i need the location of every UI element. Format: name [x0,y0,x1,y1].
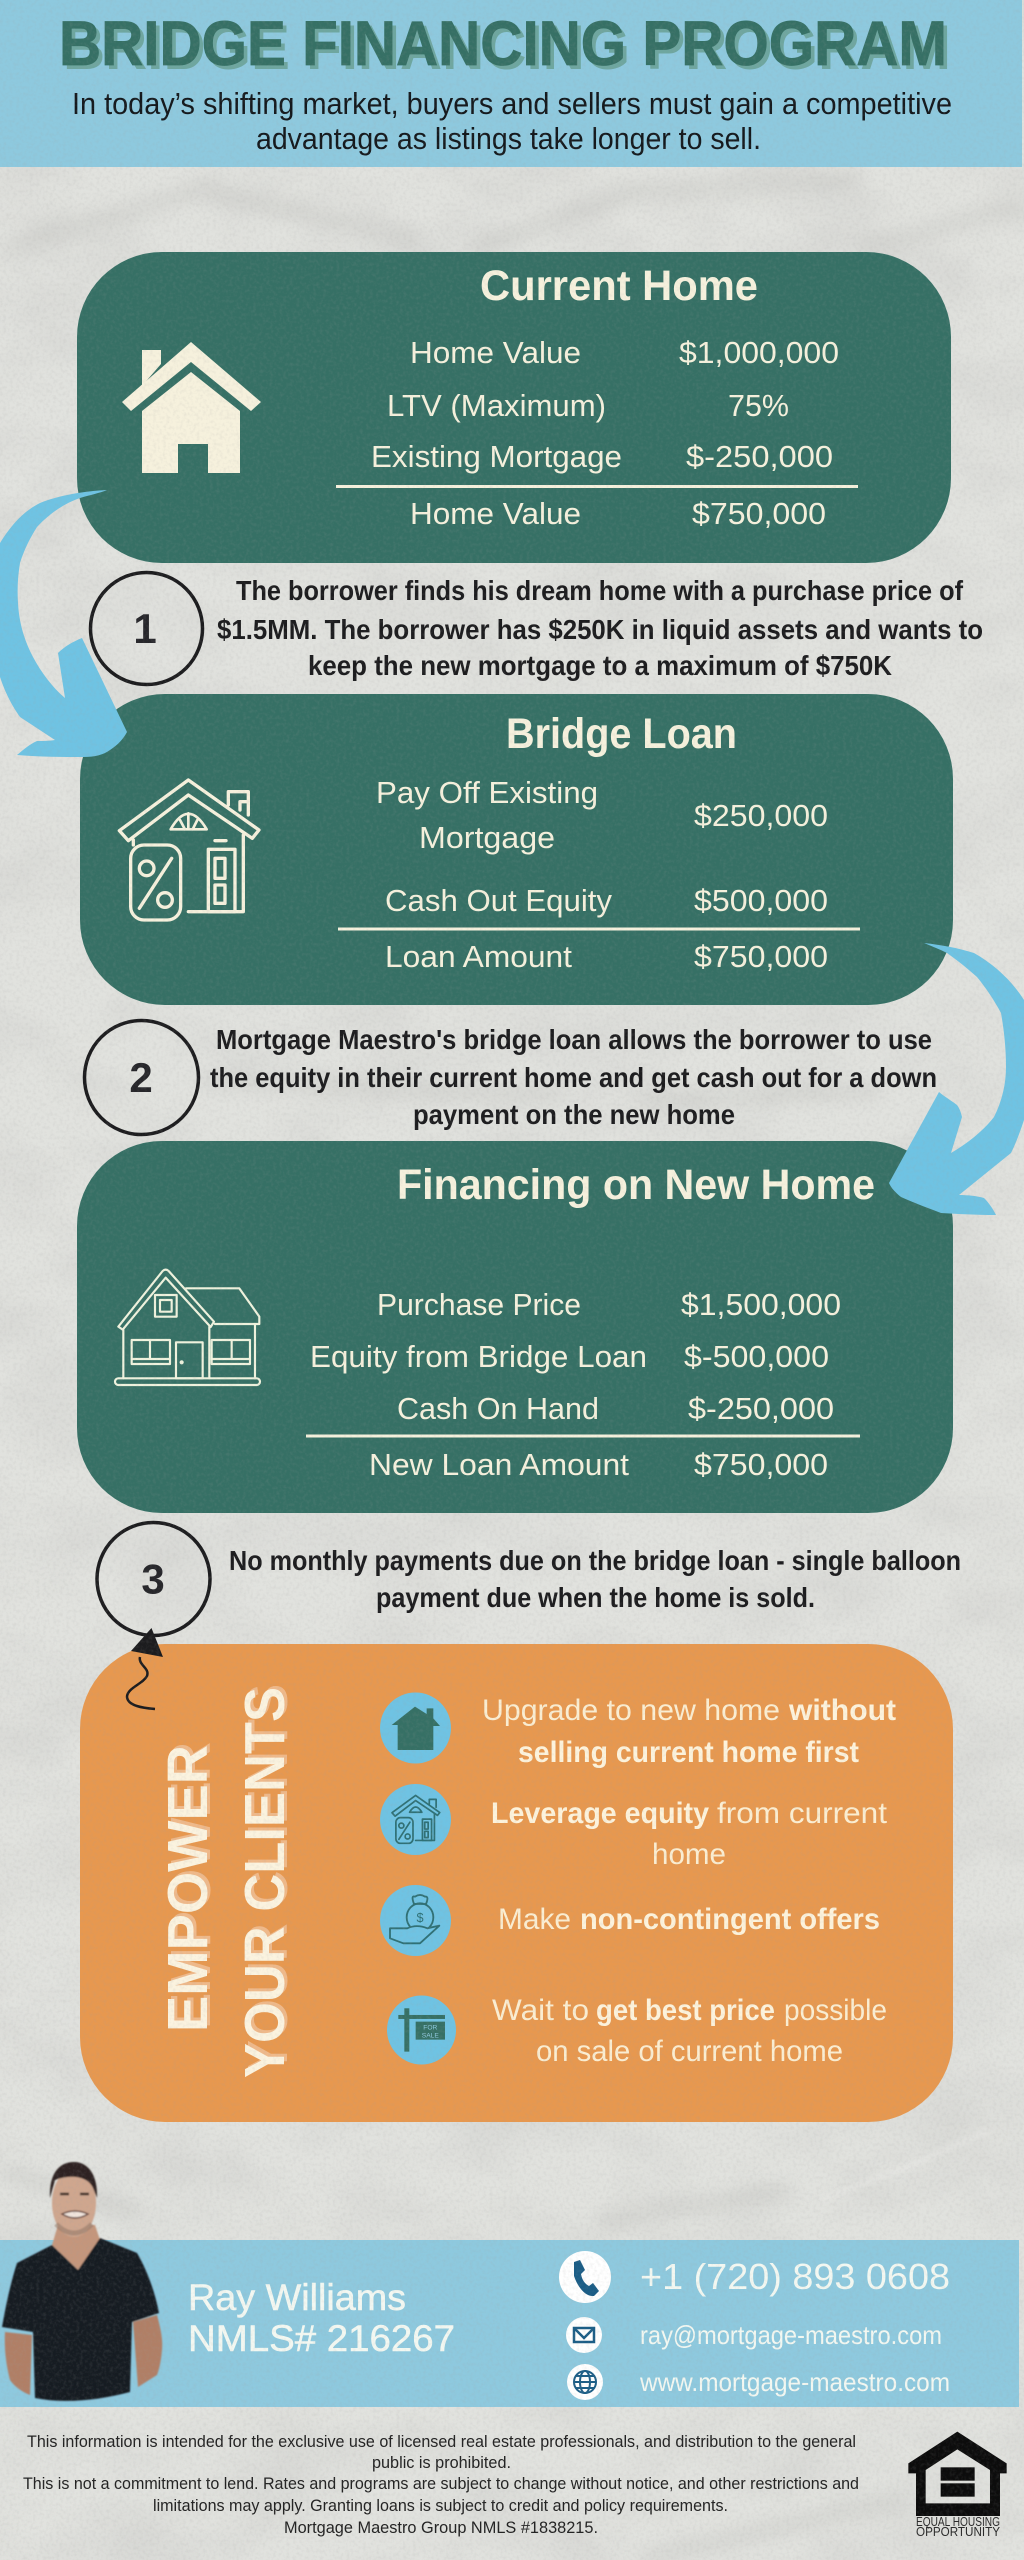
table rows: Cash Out Equity [385,883,613,918]
table rows: 75% [728,388,789,423]
agent name: NMLS# 216267 [188,2318,455,2359]
table rows: Home Value [410,335,581,370]
icon: mail [566,2317,602,2353]
panel: current home [77,252,951,563]
step 2 text: the equity in their current home and get cash out for a down [210,1062,937,1093]
equal housing logo [908,2432,1007,2539]
subtitle: In today’s shifting market, buyers and sellers must gain a competitive [72,86,952,121]
benefit 4: get best price [596,1994,775,2027]
step 1 text: $1.5MM. The borrower has $250K in liquid assets and wants to [217,614,983,645]
website: www.mortgage-maestro.com [639,2367,950,2397]
portrait [2,2162,162,2401]
benefit 2: Leverage equity [491,1797,709,1830]
icon: for sale sign badge: FOR [423,2024,438,2031]
icon: outlined house [115,1270,260,1385]
table rows: Existing Mortgage [371,439,622,474]
table rows: $500,000 [694,883,828,918]
icon: for sale sign badge [387,1996,456,2064]
card title: Financing on New Home [397,1161,875,1209]
benefit 4: possible [784,1994,887,2027]
benefit 1: selling current home first [518,1736,859,1769]
vertical heading: your clients: YOUR CLIENTS [233,1687,297,2078]
table rows: Cash On Hand [397,1391,599,1426]
step 3 text: payment due when the home is sold. [376,1582,815,1613]
step 3 balloon number: 3 [141,1556,165,1602]
benefit 1: without [788,1694,896,1727]
disclaimer [23,2433,859,2537]
benefit 4: Wait to [492,1994,589,2027]
step 1 number: 1 [133,605,157,652]
table rows: $750,000 [694,1447,828,1482]
table rows: Mortgage [419,820,555,855]
benefit 2: from current [717,1797,888,1830]
equal housing logo: OPPORTUNITY [916,2525,1001,2539]
disclaimer: limitations may apply. Granting loans is subject to credit and policy requirements. [153,2497,728,2515]
benefit 2 [491,1797,888,1871]
table rows [338,775,860,974]
table rows: Purchase Price [377,1287,581,1322]
card title: Current Home [480,262,758,310]
panel: bridge loan [80,694,953,1005]
step 3 text [229,1545,961,1613]
icon: globe [567,2364,603,2400]
panel: empower your clients [80,1644,953,2122]
table rows: New Loan Amount [369,1447,629,1482]
vertical heading: empower: EMPOWER [159,1742,223,2029]
table rows: Equity from Bridge Loan [310,1339,647,1374]
step 2 number: 2 [129,1054,153,1101]
table rows: $250,000 [694,798,828,833]
title: BRIDGE FINANCING PROGRAM [59,9,947,79]
step 2 text [210,1024,937,1130]
icon: house badge [380,1692,451,1764]
benefit 1 [482,1694,896,1769]
table rows: $1,000,000 [679,335,839,370]
benefit 2: home [652,1838,726,1871]
icon: money bag badge: $ [416,1911,424,1925]
table rows: $-250,000 [688,1391,834,1426]
subtitle [72,86,952,156]
table rows: Home Value [410,496,581,531]
arrow: current home to bridge loan [0,490,127,757]
vertical heading: your clients: YOUR CLIENTS [236,1684,300,2075]
disclaimer: Mortgage Maestro Group NMLS #1838215. [284,2519,598,2537]
panel: financing on new home [77,1141,953,1513]
benefit 4: on sale of current home [536,2035,843,2068]
email: ray@mortgage-maestro.com [640,2320,942,2350]
table rows: $-500,000 [684,1339,829,1374]
subtitle: advantage as listings take longer to sell. [256,121,761,156]
step 2 text: payment on the new home [413,1099,735,1130]
header band [0,0,1022,167]
icon: phone [559,2251,611,2303]
step 3 text: No monthly payments due on the bridge loan - single balloon [229,1545,961,1576]
step 3 balloon number [97,1522,210,1709]
table rows: $750,000 [694,939,828,974]
card title: Bridge Loan [506,710,737,758]
disclaimer: public is prohibited. [372,2454,511,2472]
agent name [188,2277,455,2359]
equal housing logo: EQUAL HOUSING [916,2515,1000,2529]
title: BRIDGE FINANCING PROGRAM [63,13,951,83]
benefit 3: non-contingent offers [580,1903,880,1936]
step 1 text [217,575,983,681]
icon: for sale sign badge: SALE [422,2032,439,2039]
step 1 text: The borrower finds his dream home with a purchase price of [236,575,964,606]
table rows: $1,500,000 [681,1287,841,1322]
step 1 text: keep the new mortgage to a maximum of $750K [308,650,892,681]
phone number: +1 (720) 893 0608 [640,2256,950,2297]
step 1 number [90,572,202,684]
benefit 3: Make [498,1903,571,1936]
arrow: bridge loan to new home [889,943,1024,1215]
disclaimer: This information is intended for the exclusive use of licensed real estate professionals, and distribution to the general [27,2433,856,2451]
table rows [336,335,858,531]
icon: solid house [122,342,261,473]
step 2 text: Mortgage Maestro's bridge loan allows the borrower to use [216,1024,932,1055]
table rows: $-250,000 [686,439,833,474]
contact band [0,2240,1019,2407]
table rows: LTV (Maximum) [387,388,606,423]
vertical heading: empower: EMPOWER [156,1745,220,2032]
step 2 number [84,1020,198,1134]
icon: money bag badge [380,1885,451,1956]
table rows: $750,000 [692,496,826,531]
benefit 1: Upgrade to new home [482,1694,780,1727]
disclaimer: This is not a commitment to lend. Rates and programs are subject to change without notice, and other restrictions and [23,2475,859,2493]
icon: percent house badge [380,1784,451,1855]
table rows [306,1287,860,1482]
benefit 4 [492,1994,887,2068]
icon: house with percent tag [119,780,259,920]
agent name: Ray Williams [188,2277,406,2318]
table rows: Pay Off Existing [376,775,598,810]
table rows: Loan Amount [385,939,572,974]
